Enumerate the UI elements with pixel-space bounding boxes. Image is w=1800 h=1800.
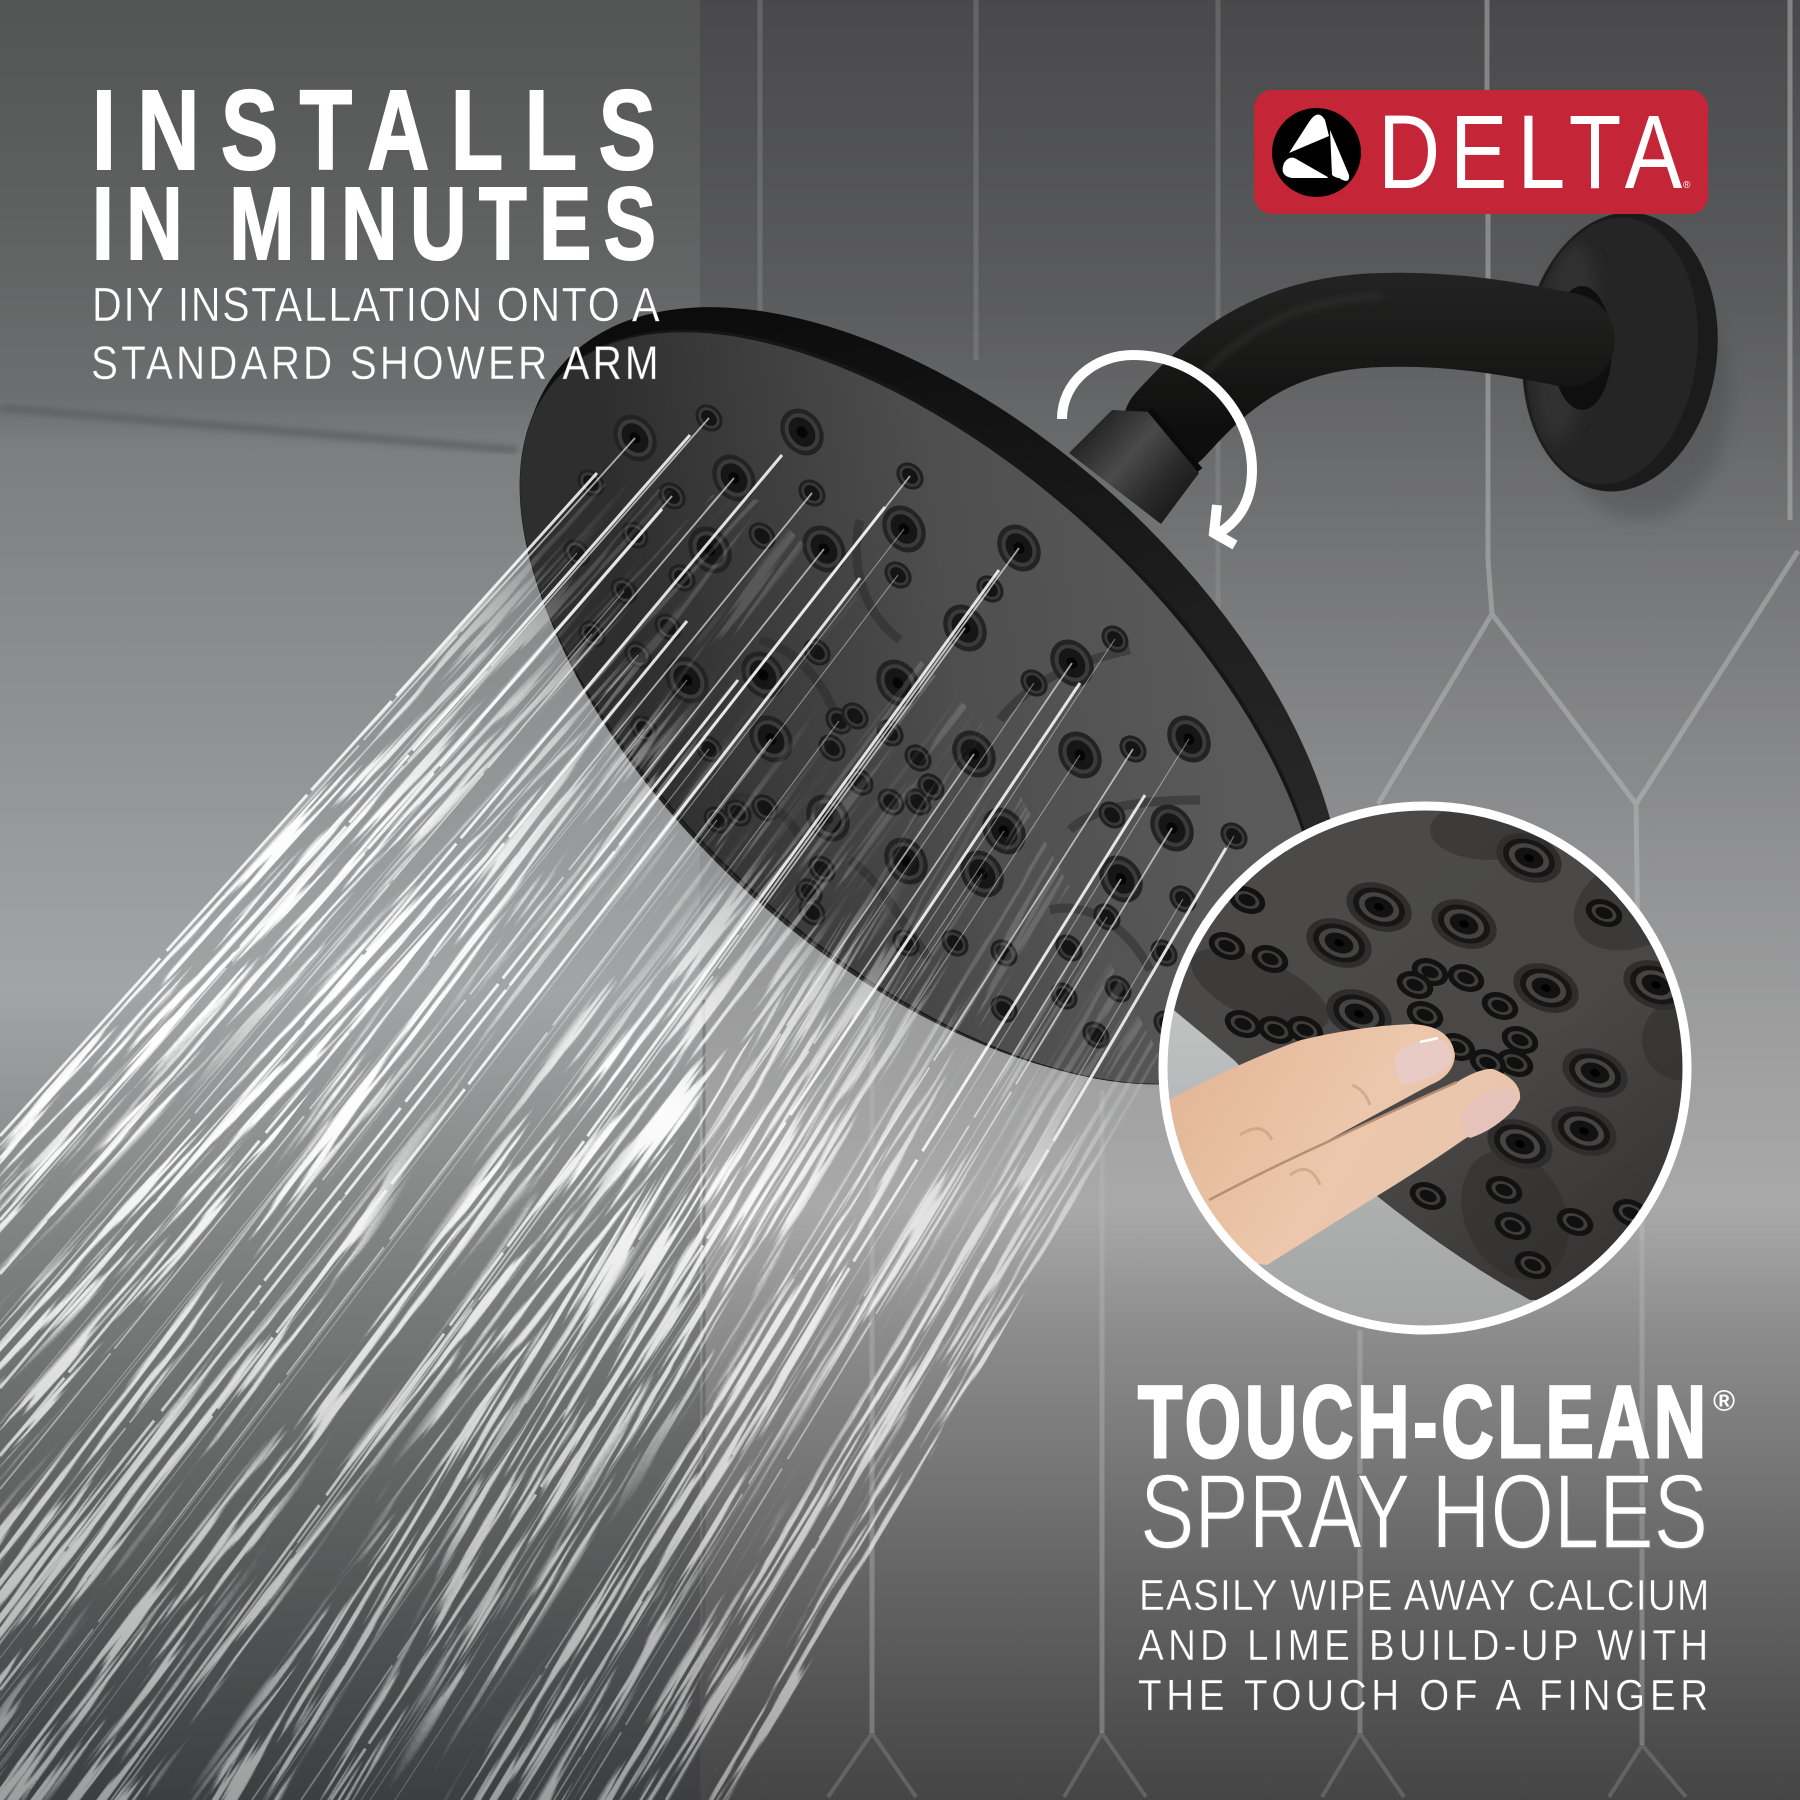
recessed lobes (720, 520, 1200, 970)
subtitle line 2: STANDARD SHOWER ARM (91, 337, 659, 390)
flange shadow (1550, 270, 1730, 520)
title line 2: IN MINUTES (92, 167, 656, 282)
thin streaks (0, 529, 1234, 1800)
heading: installs in minutes (91, 68, 660, 390)
logo: Delta (1254, 90, 1708, 214)
spray nozzles (558, 399, 1253, 1054)
title line 1: INSTALLS (92, 68, 656, 194)
middle band (0, 500, 980, 1800)
red badge (1254, 90, 1708, 214)
arm collar (1552, 286, 1612, 410)
icon: delta emblem (1272, 108, 1361, 197)
shower head (383, 162, 1481, 1228)
heading: touch-clean spray holes (1138, 1365, 1735, 1720)
zoomed nozzles (1205, 824, 1696, 1284)
left band (0, 482, 760, 1500)
title: touch-clean: TOUCH-CLEAN (1138, 1365, 1706, 1479)
medium streaks (0, 418, 1172, 1800)
rotation arrow (1062, 355, 1252, 545)
outer rim (383, 162, 1481, 1228)
fingernails (1395, 1039, 1451, 1086)
subtitle line 1: DIY INSTALLATION ONTO A (92, 278, 660, 332)
face lobes (1191, 811, 1682, 1260)
curved arm (1170, 320, 1568, 425)
right band (200, 720, 1160, 1800)
close-up photo (1168, 810, 1682, 1326)
registered mark: ® (1683, 180, 1691, 191)
water spray (0, 418, 1234, 1800)
body line 1: EASILY WIPE AWAY CALCIUM (1139, 1570, 1709, 1620)
body line 2: AND LIME BUILD-UP WITH (1138, 1620, 1708, 1670)
water texture (0, 482, 1160, 1800)
shower arm and wall flange (1069, 201, 1733, 524)
face plate (391, 197, 1449, 1219)
callout: touch-clean close-up (1140, 795, 1722, 1340)
connector nut (1069, 410, 1199, 524)
face edge (389, 193, 1453, 1221)
registered mark: ® (1713, 1385, 1735, 1418)
bright streaks (0, 435, 1226, 1800)
fingers (1150, 1024, 1520, 1265)
white ring (1163, 806, 1687, 1330)
body line 3: THE TOUCH OF A FINGER (1138, 1670, 1708, 1720)
wall flange (1507, 201, 1733, 503)
wordmark: DELTA (1378, 94, 1682, 211)
zoomed head face (1174, 810, 1682, 1300)
